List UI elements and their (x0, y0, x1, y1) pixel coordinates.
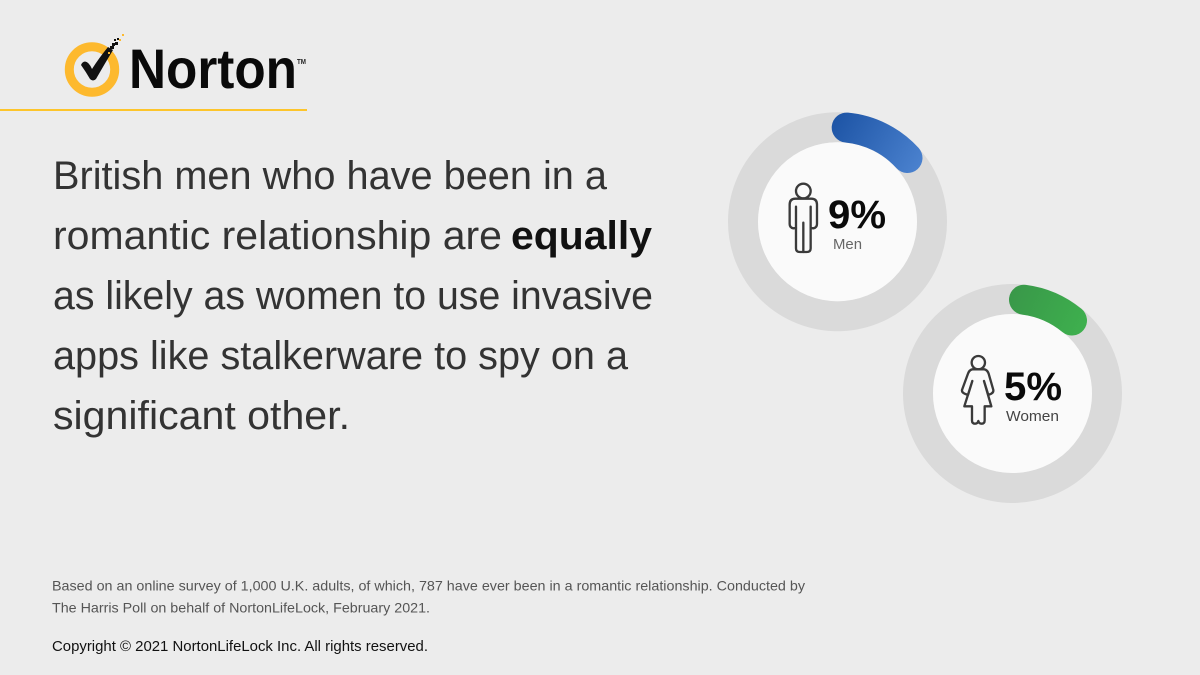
heading text block: significant other. (53, 394, 350, 438)
donut value arc (847, 128, 908, 158)
heading text block (53, 154, 653, 438)
icon: Norton gold ring (69, 47, 115, 92)
source note: The Harris Poll on behalf of NortonLifeLock, February 2021. (52, 600, 430, 616)
logo: Norton (69, 34, 306, 100)
wordmark: Norton (129, 37, 297, 100)
donut centre (933, 314, 1092, 473)
source note (52, 578, 805, 616)
trademark: TM (297, 59, 306, 66)
value: 9%: 9% (828, 193, 886, 237)
donut track (918, 299, 1107, 488)
copyright: Copyright © 2021 NortonLifeLock Inc. All rights reserved. (52, 639, 428, 655)
icon: man (790, 184, 817, 252)
heading text block: British men who have been in a (53, 154, 608, 198)
heading text block: romantic relationship are (53, 214, 502, 258)
chart: women donut 5% (918, 299, 1107, 488)
icon: check mark (81, 47, 113, 80)
source note: Based on an online survey of 1,000 U.K. adults, of which, 787 have ever been in a romantic relationship. Conducted by (52, 578, 805, 594)
label: Women: Women (1006, 408, 1059, 425)
donut track (743, 127, 932, 316)
donut centre (758, 142, 917, 301)
icon: woman (962, 356, 993, 424)
heading text block: apps like stalkerware to spy on a (53, 334, 629, 378)
heading text block: as likely as women to use invasive (53, 274, 653, 318)
value: 5%: 5% (1004, 365, 1062, 409)
gold divider (0, 109, 307, 111)
chart: men donut 9% (743, 127, 932, 316)
icon: pixel trail (107, 34, 124, 54)
label: Men: Men (833, 236, 862, 253)
heading text block: equally (511, 214, 653, 258)
donut value arc (1024, 300, 1072, 320)
